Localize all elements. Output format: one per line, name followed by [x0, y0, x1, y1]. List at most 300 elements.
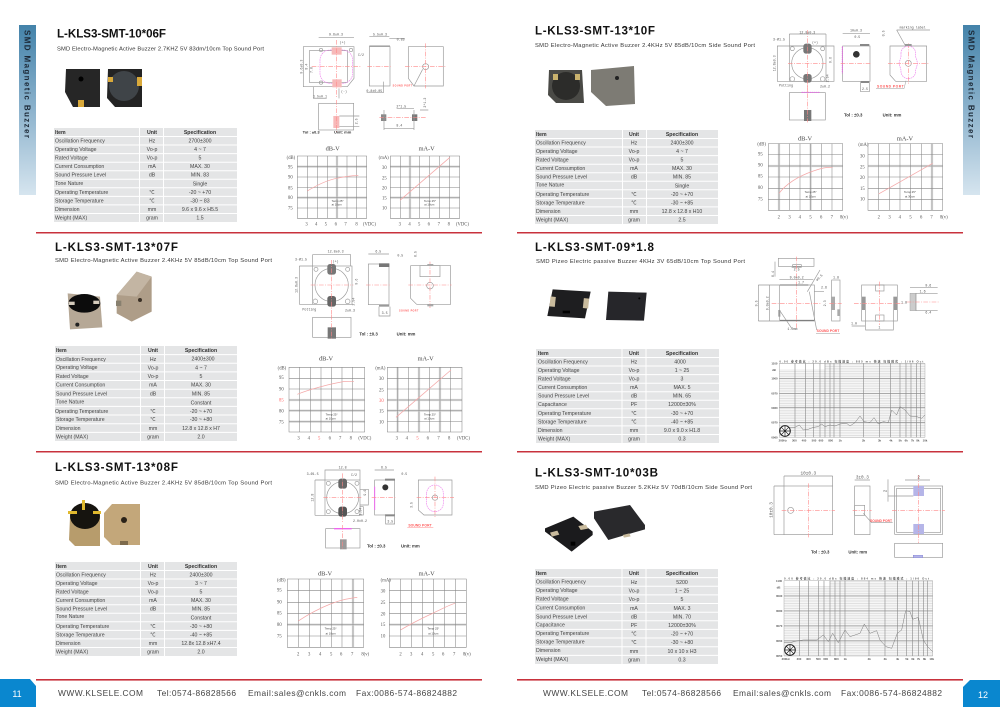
frequency response chart: 400	[802, 438, 807, 442]
contact details: Fax:0086-574-86824882	[841, 688, 942, 698]
chart: mA-V: 6	[428, 222, 431, 227]
dimension drawing: SOUND PORT	[870, 519, 892, 523]
contact details	[58, 688, 457, 698]
chart: dB-V: 80	[277, 623, 282, 628]
spec table: Single	[193, 181, 207, 187]
spec table: gram	[146, 216, 158, 222]
chart: dB-V: 5	[330, 652, 333, 657]
spec table: Hz	[149, 138, 156, 144]
subtitle: SMD Pizeo Electric passive Buzzer 4KHz 3V 65dB/10cm Top Sound Port	[536, 259, 745, 265]
chart: dB-V: 95	[288, 165, 293, 170]
spec table: 4 ~ 7	[194, 147, 206, 153]
spec table	[535, 569, 718, 664]
panel: L-KLS3-SMT-09*1.8	[535, 241, 940, 443]
dimension drawing: 2.5	[355, 118, 359, 124]
divider: middle left	[36, 451, 482, 452]
spec table: MAX. 30	[191, 382, 211, 388]
spec table: mA	[630, 166, 638, 172]
dimension drawing: 2.54	[826, 74, 830, 82]
spec table: Sound Pressure Level	[536, 614, 587, 620]
chart: mA-V: 3	[410, 652, 413, 657]
spec table: Sound Pressure Level	[538, 394, 589, 400]
chart: dB-V: 75	[288, 207, 293, 212]
dimension drawing: 2±0.2	[820, 85, 830, 89]
spec table: dB	[150, 607, 157, 613]
dimension drawing: Tol : ±0.3	[367, 543, 386, 548]
chart: dB-V: 8	[350, 437, 353, 442]
spec table: 4000	[674, 360, 686, 366]
spec table: 0.3	[678, 436, 686, 442]
spec table: Vo-p	[148, 590, 158, 596]
spec table: Operating Voltage	[538, 368, 580, 374]
chart: mA-V: 2	[878, 215, 881, 220]
frequency response chart: 1000	[771, 377, 778, 381]
spec table: Current Consumption	[56, 382, 105, 388]
dimension drawing	[294, 250, 452, 339]
frequency response chart: 300	[792, 438, 797, 442]
frequency response chart: 10k	[923, 438, 928, 442]
spec table: gram	[147, 434, 159, 440]
dimension drawing: 12.8±0.3	[328, 250, 344, 254]
frequency response chart: 0.00 参考值比 : 20.0 dBs 扫描速度 : 884 ms 快速 扫描模式 : 1/96 Oct	[784, 576, 929, 580]
dimension drawing: 0.5	[414, 251, 418, 257]
product photo	[68, 272, 152, 329]
dimension drawing: 0.5	[401, 472, 407, 476]
title: L-KLS3-SMT-09*1.8	[535, 241, 655, 254]
dimension drawing: 1.0	[851, 322, 857, 326]
dimension drawing: 3-Ø1.5	[295, 257, 307, 261]
dimension drawing: 2	[883, 489, 888, 492]
spec table: Storage Temperature	[56, 417, 105, 423]
chart: dB-V	[278, 356, 372, 442]
spec table	[535, 130, 718, 224]
spec table: 12.8 x 12.8 x H7	[182, 426, 220, 432]
spec table	[536, 349, 719, 443]
chart: mA-V: 30	[860, 154, 865, 159]
subtitle: SMD Electro-Magnetic Active Buzzer 2.7KHZ 5V 83dm/10cm Top Sound Port	[57, 46, 264, 52]
chart: dB-V: 8	[355, 222, 358, 227]
spec table: 5	[681, 158, 684, 164]
spec table: Tone Nature	[56, 400, 84, 406]
dimension drawing	[769, 471, 945, 558]
chart: dB-V: 4	[799, 215, 802, 220]
chart: mA-V: (mA)	[379, 156, 389, 161]
spec table: 12.8 x 12.8 x H10	[662, 209, 702, 215]
chart: mA-V: 6	[427, 437, 430, 442]
dimension drawing	[755, 257, 940, 333]
chart: dB-V: 95	[758, 152, 763, 157]
spec table: PF	[631, 402, 637, 408]
chart: mA-V: at 10cm	[428, 631, 439, 635]
chart: dB-V: 6	[329, 437, 332, 442]
frequency response chart: dB	[772, 368, 776, 372]
chart: dB-V: 85	[758, 175, 763, 180]
chart: dB-V: 75	[277, 634, 282, 639]
dimension drawing: Tol : ±0.3	[811, 550, 830, 555]
dimension drawing: Tol : ±0.3	[844, 113, 863, 118]
dimension drawing: 8.4	[305, 64, 309, 70]
spec table: 1.5	[196, 216, 204, 222]
spec table: Rated Voltage	[538, 377, 571, 383]
dimension drawing: 2.0±0.2	[353, 519, 367, 523]
chart: dB-V: dB-V	[798, 135, 812, 142]
spec table: 9.6 x 9.6 x H5.5	[182, 207, 218, 213]
spec table: 5	[200, 374, 203, 380]
spec table: 3 ~ 7	[195, 581, 207, 587]
chart: mA-V: (mA)	[381, 579, 391, 584]
frequency response chart: 0070	[771, 421, 778, 425]
spec table: 2.0	[197, 650, 205, 656]
spec table: Specification	[666, 571, 698, 577]
spec table: 2.5	[678, 218, 686, 224]
chart: mA-V: 4	[899, 215, 902, 220]
spec table: ℃	[150, 631, 156, 638]
chart: mA-V: 5	[418, 222, 421, 227]
spec table: Operating Voltage	[55, 147, 97, 153]
dimension drawing: 12.8±0.3	[773, 55, 777, 71]
product photo	[65, 69, 142, 107]
spec table: -20 ~ +70	[189, 190, 211, 196]
dimension drawing: Unit: mm	[883, 113, 902, 118]
spec table: Vo-p	[629, 377, 639, 383]
dimension drawing: 1.7	[798, 280, 804, 284]
frequency response chart: 200Hz	[779, 438, 787, 442]
spec table: Vo-p	[148, 581, 158, 587]
frequency response chart: 3k	[878, 438, 882, 442]
dimension drawing: 9.6	[355, 279, 359, 285]
chart: dB-V: Temp 25°	[325, 627, 337, 631]
chart: mA-V: 5	[432, 652, 435, 657]
dimension drawing: Unit: mm	[401, 543, 420, 548]
dimension drawing: C/2	[351, 473, 357, 477]
spec table: Vo-p	[147, 156, 157, 162]
frequency response chart: 800	[834, 657, 839, 661]
chart: dB-V: Temp 25°	[805, 190, 817, 194]
spec table: 2400±300	[189, 572, 213, 578]
chart: dB-V: 85	[288, 186, 293, 191]
spec table: 5200	[676, 580, 688, 586]
spec table: dB	[150, 392, 157, 398]
spec table: 1 ~ 25	[675, 368, 689, 374]
chart: dB-V: 5	[318, 437, 321, 442]
spec table: Dimension	[56, 426, 81, 432]
spec table: Oscillation Frequency	[56, 572, 106, 578]
chart: dB-V: 6	[340, 652, 343, 657]
spec table: ℃	[150, 408, 156, 415]
chart: mA-V: 3	[396, 437, 399, 442]
chart: mA-V: 7	[437, 437, 440, 442]
dimension drawing: 9.5	[755, 300, 759, 306]
spec table: Operating Voltage	[56, 581, 98, 587]
chart: dB-V: 6	[820, 215, 823, 220]
dimension drawing: 2	[917, 475, 920, 480]
chart: mA-V	[375, 356, 470, 442]
spec table: Oscillation Frequency	[538, 360, 588, 366]
frequency response chart: 2k	[868, 657, 871, 661]
frequency response chart: 1k	[844, 657, 847, 661]
spec table: Rated Voltage	[55, 156, 88, 162]
spec table: Operating Temperature	[55, 190, 108, 196]
spec table: mA	[148, 164, 156, 170]
dimension drawing: 1.6	[920, 290, 926, 294]
spec table: ℃	[631, 410, 637, 417]
chart: dB-V: 80	[758, 186, 763, 191]
spec table: Sound Pressure Level	[56, 607, 107, 613]
dimension drawing: Potting	[779, 84, 793, 88]
chart: dB-V: dB-V	[318, 571, 332, 578]
chart: dB-V: 2	[297, 652, 300, 657]
spec table: MIN. 85	[192, 607, 210, 613]
spec table: 5	[199, 156, 202, 162]
spec table: Weight (MAX)	[56, 650, 88, 656]
spec table: Operating Temperature	[538, 411, 591, 417]
spec table: 9.0 x 9.0 x H1.8	[664, 428, 700, 434]
spec table: Current Consumption	[55, 164, 104, 170]
frequency response chart: 5k	[899, 438, 902, 442]
chart: dB-V: 7	[339, 437, 342, 442]
page number 11	[0, 679, 36, 707]
chart: dB-V: 8(v)	[361, 652, 370, 657]
panel: L-KLS3-SMT-13*07F	[55, 241, 470, 442]
chart: dB-V: at 10cm	[332, 203, 342, 207]
frequency response chart: 0.00 参考值比 : 20.0 dBs 扫描速度 : 885 ms 快速 扫描模式 : 1/96 Oct	[779, 359, 923, 363]
product photo	[545, 505, 645, 552]
chart: dB-V: 85	[279, 399, 284, 404]
spec table: gram	[628, 218, 640, 224]
spec table: Item	[538, 351, 549, 357]
spec table: Vo-p	[629, 597, 639, 603]
spec table: Unit	[148, 348, 158, 354]
dimension drawing: 9.6	[363, 490, 367, 496]
frequency response chart: 0090	[776, 594, 783, 598]
dimension drawing: 0.5	[397, 254, 403, 258]
spec table: dB	[631, 614, 638, 620]
spec table: Storage Temperature	[56, 632, 105, 638]
chart: mA-V: mA-V	[418, 356, 434, 363]
chart: mA-V: 20	[381, 612, 386, 617]
spec table: Storage Temperature	[538, 419, 587, 425]
frequency response chart: 200Hz	[782, 657, 790, 661]
spec table: MAX. 30	[191, 598, 211, 604]
right sidebar: SMD Magnetic Buzzer: SMD Magnetic Buzzer	[966, 30, 976, 138]
dimension drawing: 2.6	[821, 286, 827, 290]
spec table: MAX. 5	[673, 385, 691, 391]
dimension drawing: 10±0.3	[801, 471, 817, 476]
spec table: Vo-p	[629, 149, 639, 155]
spec table: 12000±30%	[668, 402, 696, 408]
dimension drawing: 6.5	[381, 466, 387, 470]
dimension drawing: (+)	[333, 259, 339, 263]
spec table: Unit	[147, 130, 157, 136]
spec table: Dimension	[538, 428, 563, 434]
frequency response chart: 4k	[889, 438, 893, 442]
spec table: Dimension	[536, 209, 561, 215]
chart: mA-V: 2	[399, 652, 402, 657]
spec table: Vo-p	[148, 366, 158, 372]
dimension drawing: SOUND PORT	[817, 329, 839, 333]
spec table: 0.3	[678, 658, 686, 664]
chart: mA-V: Temp 25°	[904, 190, 916, 194]
spec table: Weight (MAX)	[538, 436, 570, 442]
spec table: Tone Nature	[536, 182, 564, 188]
spec table: Rated Voltage	[56, 374, 89, 380]
divider: top right	[517, 232, 963, 234]
title: L-KLS3-SMT-10*06F	[57, 28, 166, 40]
chart: dB-V: 90	[288, 176, 293, 181]
dimension drawing: Unit: mm	[334, 130, 352, 135]
dimension drawing: 9.6	[925, 284, 931, 288]
chart: dB-V: (dB)	[757, 142, 766, 147]
chart: mA-V: 4	[421, 652, 424, 657]
frequency response chart: 0070	[776, 624, 783, 628]
contact details: WWW.KLSELE.COM	[58, 688, 143, 698]
dimension drawing: SOUND PORT	[408, 524, 432, 528]
subtitle: SMD Pizeo Electric passive Buzzer 5.2KHz 5V 70dB/10cm Side Sound Port	[535, 485, 752, 491]
contact details: Tel:0574-86828566	[642, 688, 721, 698]
spec table: Vo-p	[147, 147, 157, 153]
panel: L-KLS3-SMT-10*03B	[535, 466, 945, 664]
dimension drawing: 9.6	[829, 57, 833, 63]
spec table: mm	[149, 426, 157, 432]
dimension drawing: SOUND PORT	[399, 311, 419, 313]
spec table: Oscillation Frequency	[536, 140, 586, 146]
spec table: Specification	[185, 564, 217, 570]
dimension drawing: Unit: mm	[848, 550, 867, 555]
dimension drawing: 0.4	[771, 271, 775, 277]
frequency response chart: 300	[797, 657, 802, 661]
spec table: mA	[149, 598, 157, 604]
spec table: Single	[675, 183, 689, 189]
title: L-KLS3-SMT-13*08F	[55, 461, 178, 474]
spec table: MIN. 83	[191, 173, 209, 179]
spec table: dB	[631, 175, 638, 181]
spec table	[55, 346, 237, 441]
frequency response chart: 5k	[905, 657, 909, 661]
chart: mA-V: 15	[860, 187, 865, 192]
chart: mA-V: 15	[379, 410, 384, 415]
dimension drawing: SOUND PORT	[393, 85, 413, 87]
frequency response chart: 7k	[911, 438, 915, 442]
chart: mA-V: 7	[438, 222, 441, 227]
subtitle: SMD Electro-Magnetic Active Buzzer 2.4KHz 5V 85dB/10cm Side Sound Port	[535, 43, 755, 49]
chart: dB-V: dB-V	[319, 356, 333, 363]
chart: mA-V: 15	[381, 623, 386, 628]
dimension drawing: 10±0.3	[850, 29, 862, 33]
dimension drawing: 1.8	[901, 300, 907, 304]
dimension drawing: 2*1.2	[423, 98, 427, 108]
chart: mA-V: Temp 25°	[424, 412, 436, 416]
spec table: Unit	[629, 571, 639, 577]
frequency response chart: 1100	[776, 579, 783, 583]
panel: L-KLS3-SMT-13*10F	[535, 24, 948, 224]
spec table: Item	[536, 132, 547, 138]
contact details: Tel:0574-86828566	[157, 688, 236, 698]
dimension drawing: 1.5±0.1	[313, 94, 327, 98]
chart: mA-V: 3	[888, 215, 891, 220]
frequency response chart: 4k	[896, 657, 900, 661]
dimension drawing: (+)	[340, 40, 346, 44]
footer: right page	[517, 679, 1000, 707]
chart: dB-V: dB-V	[326, 145, 340, 152]
chart: dB-V: 7	[344, 222, 347, 227]
dimension drawing: (+)	[812, 40, 818, 44]
frequency response chart: 8k	[916, 438, 920, 442]
spec table: MIN. 85	[192, 392, 210, 398]
spec table: mm	[630, 649, 638, 655]
chart: mA-V: 20	[382, 186, 387, 191]
dimension drawing: 0.85	[397, 38, 405, 42]
chart: dB-V	[277, 571, 370, 657]
spec table: Operating Temperature	[536, 631, 589, 637]
dimension drawing: 2.5	[794, 268, 800, 272]
chart: dB-V: at 10cm	[326, 416, 336, 420]
dimension drawing: 12.8	[339, 466, 347, 470]
spec table: -30 ~ 83	[190, 198, 210, 204]
dimension drawing: Potting	[302, 307, 316, 311]
spec table: 12.8x 12.8 xH7.4	[181, 641, 221, 647]
dimension drawing: (-)	[341, 89, 347, 93]
chart: mA-V: 4	[408, 222, 411, 227]
chart: mA-V: (mA)	[858, 143, 869, 148]
dimension drawing: 1.8	[833, 276, 839, 280]
dimension drawing: 10±0.3	[769, 502, 774, 518]
spec table: -20 ~ +70	[671, 632, 693, 638]
chart: mA-V: 7	[930, 215, 933, 220]
spec table	[55, 562, 237, 656]
spec table: Operating Temperature	[55, 409, 108, 415]
spec table: Constant	[191, 400, 212, 406]
chart: mA-V: 6	[920, 215, 923, 220]
dimension drawing: 2.3	[823, 300, 827, 306]
page number 11: 11	[12, 689, 22, 699]
chart: mA-V: 25	[382, 176, 387, 181]
frequency response chart: 3k	[884, 657, 887, 661]
spec table: Dimension	[536, 648, 561, 654]
spec table: -30 ~ +80	[190, 624, 212, 630]
spec table: mm	[630, 428, 638, 434]
contact details: Email:sales@cnkls.com	[733, 688, 831, 698]
spec table: gram	[628, 436, 640, 442]
chart: dB-V: 95	[277, 589, 282, 594]
right sidebar: SMD Magnetic Buzzer	[963, 25, 980, 195]
chart: dB-V: 2	[778, 215, 781, 220]
dimension drawing: Tol : ±0.3	[303, 130, 320, 135]
dimension drawing: 2.5	[862, 87, 868, 91]
dimension drawing: 3.5	[387, 519, 393, 523]
spec table: Sound Pressure Level	[536, 175, 587, 181]
spec table: Storage Temperature	[55, 198, 104, 204]
spec table: Vo-p	[629, 368, 639, 374]
left sidebar: SMD Magnetic Buzzer	[19, 25, 36, 195]
chart: mA-V: 8(v)	[940, 215, 948, 220]
spec table: 2.0	[197, 434, 205, 440]
spec table: Hz	[631, 140, 638, 146]
dimension drawing: 3.5	[410, 502, 414, 508]
dimension drawing: Unit: mm	[397, 332, 416, 337]
chart: mA-V: 20	[860, 176, 865, 181]
dimension drawing: 2±0.3	[345, 308, 355, 312]
chart: dB-V	[287, 145, 376, 227]
divider: top left	[36, 232, 482, 234]
chart: mA-V: 3	[399, 222, 402, 227]
spec table: ℃	[631, 191, 637, 198]
spec table: Storage Temperature	[536, 640, 585, 646]
chart: mA-V: 15	[382, 196, 387, 201]
subtitle: SMD Electro-Magnetic Active Buzzer 2.4KHz 5V 85dB/10cm Top Sound Port	[55, 258, 272, 264]
chart: mA-V: 8	[448, 437, 451, 442]
dimension drawing: 7.0	[309, 67, 313, 73]
chart: dB-V: 5	[325, 222, 328, 227]
